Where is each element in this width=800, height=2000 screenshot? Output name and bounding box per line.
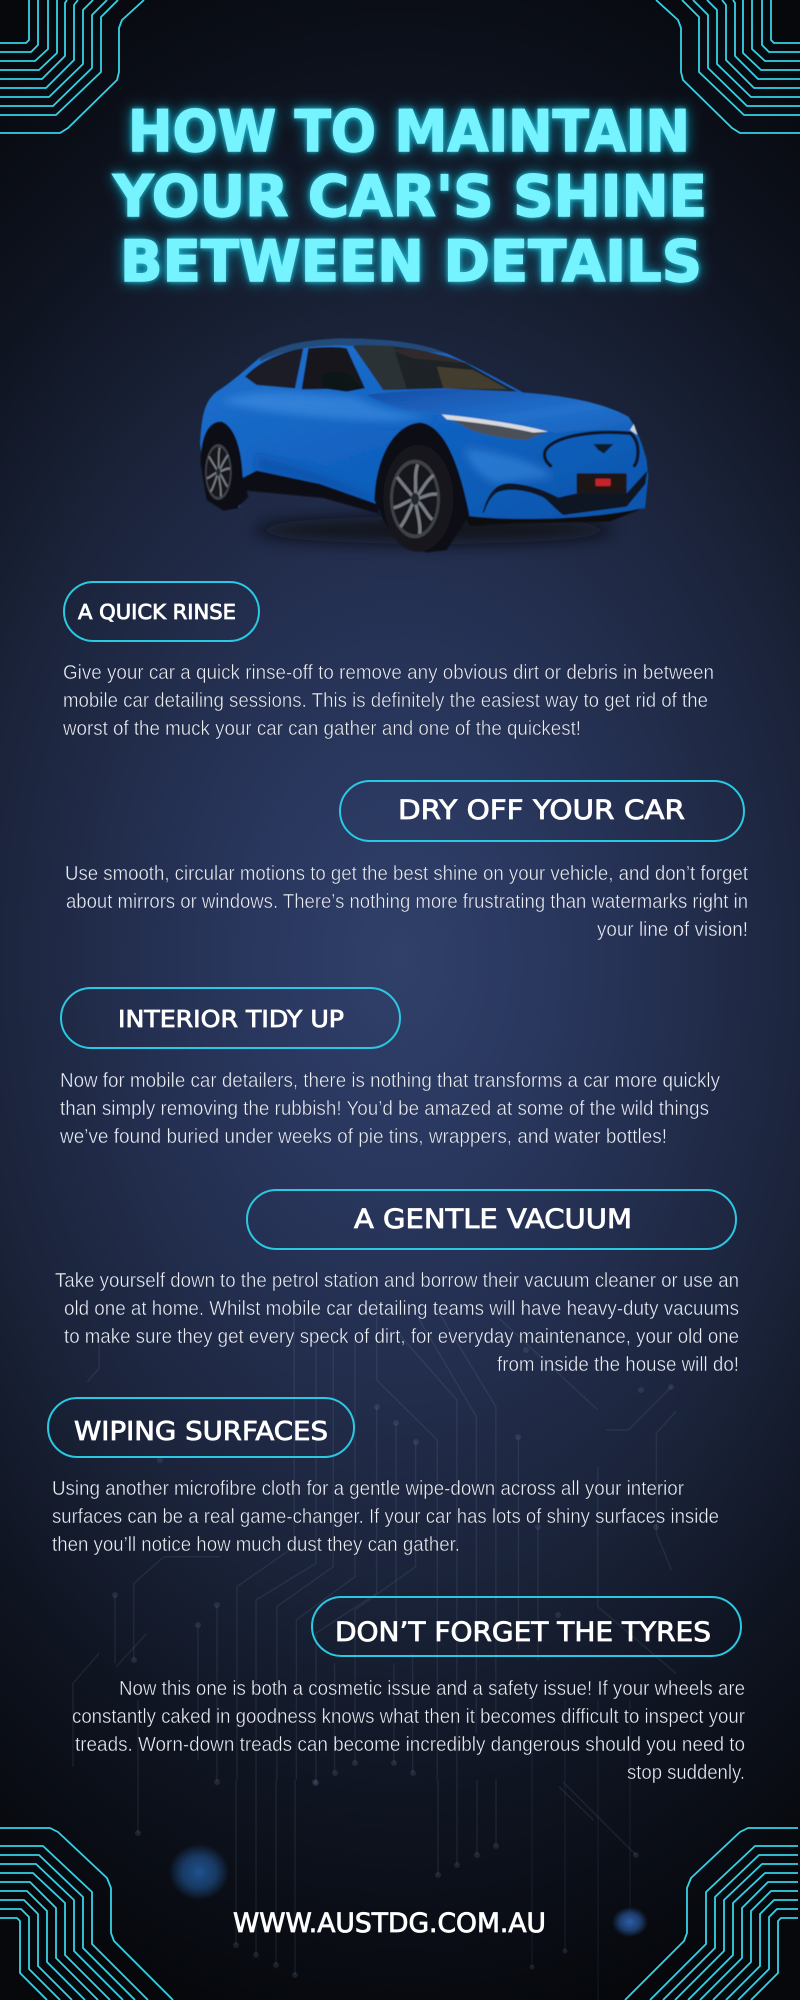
background circuit pattern (73, 1300, 676, 2000)
body text: interior tidy up: than simply removing the rubbish! You’d be amazed at some of the wild things (60, 1098, 709, 1120)
pill heading: wiping surfaces (48, 1398, 354, 1457)
body text: dry off your car: about mirrors or windows. There’s nothing more frustrating than watermarks right in (66, 891, 748, 913)
body text: a gentle vacuum: old one at home. Whilst mobile car detailing teams will have heavy-duty vacuums (64, 1298, 739, 1320)
body text: a quick rinse (62, 662, 714, 740)
body text: interior tidy up (59, 1070, 720, 1148)
body text: a quick rinse: Give your car a quick rinse-off to remove any obvious dirt or debris in between (63, 662, 714, 684)
section 5: wiping surfaces (48, 1398, 719, 1556)
body text: don't forget the tyres: Now this one is both a cosmetic issue and a safety issue! If your wheels are (119, 1678, 745, 1700)
body text: a quick rinse: worst of the muck your car can gather and one of the quickest! (62, 718, 581, 740)
license plate (577, 473, 627, 493)
body text: a gentle vacuum: to make sure they get every speck of dirt, for everyday maintenance, your old one (64, 1326, 739, 1348)
pill heading: a quick rinse (64, 582, 259, 641)
roof (260, 338, 447, 362)
body text: don't forget the tyres: stop suddenly. (627, 1762, 745, 1784)
title: HOW TO MAINTAIN (128, 99, 690, 165)
body text: wiping surfaces: surfaces can be a real game-changer. If your car has lots of shiny surfaces inside (52, 1506, 719, 1528)
grille (544, 432, 638, 467)
splitter (463, 507, 645, 526)
car illustration (200, 338, 648, 552)
section 4: a gentle vacuum (55, 1190, 739, 1376)
pill heading: a quick rinse: A QUICK RINSE (78, 600, 236, 624)
body text: wiping surfaces (52, 1478, 719, 1556)
corner lines: bottom right (625, 1828, 798, 2000)
pill heading: dry off your car (340, 781, 744, 841)
body text: dry off your car: Use smooth, circular motions to get the best shine on your vehicle, and don’t forget (65, 863, 748, 885)
front intake (483, 471, 647, 515)
title: BETWEEN DETAILS (120, 229, 702, 295)
body text: a gentle vacuum: from inside the house will do! (497, 1354, 739, 1376)
section 3: interior tidy up (59, 988, 720, 1148)
pill heading: don't forget the tyres (312, 1597, 741, 1656)
body text: dry off your car (65, 863, 748, 941)
body text: don't forget the tyres (72, 1678, 745, 1784)
title (112, 99, 707, 295)
glow: left blue light (169, 1844, 229, 1900)
rear wheel arch (201, 422, 248, 511)
front wheel arch (374, 423, 469, 552)
glow: right blue light (612, 1907, 648, 1937)
body text: interior tidy up: we’ve found buried under weeks of pie tins, wrappers, and water bottles! (59, 1126, 667, 1148)
footer url: WWW.AUSTDG.COM.AU (233, 1908, 546, 1939)
body text: wiping surfaces: then you’ll notice how much dust they can gather. (52, 1534, 460, 1556)
corner lines: bottom left (0, 1828, 173, 2000)
body text: wiping surfaces: Using another microfibre cloth for a gentle wipe-down across all your interior (52, 1478, 684, 1500)
body text: a gentle vacuum (55, 1270, 739, 1376)
side skirt (242, 471, 380, 514)
section 6: don't forget the tyres (72, 1597, 745, 1784)
windows (245, 348, 303, 388)
body text: don't forget the tyres: treads. Worn-down treads can become incredibly dangerous should you need to (75, 1734, 745, 1756)
body text: dry off your car: your line of vision! (597, 919, 748, 941)
title: YOUR CAR'S SHINE (112, 164, 707, 230)
pill heading: wiping surfaces: WIPING SURFACES (74, 1417, 328, 1447)
pill heading: a gentle vacuum (247, 1190, 736, 1249)
body text: interior tidy up: Now for mobile car detailers, there is nothing that transforms a car more quickly (60, 1070, 720, 1092)
corner lines: top right (656, 0, 800, 133)
pill heading: don't forget the tyres: DON’T FORGET THE TYRES (335, 1617, 711, 1648)
pill heading: interior tidy up (61, 988, 400, 1048)
emblem (593, 444, 613, 453)
mirror (322, 372, 364, 392)
body text: a quick rinse: mobile car detailing sessions. This is definitely the easiest way to get rid of the (63, 690, 708, 712)
section 1: a quick rinse (62, 582, 714, 740)
headlight (442, 415, 547, 440)
pill heading: interior tidy up: INTERIOR TIDY UP (118, 1005, 344, 1033)
corner lines: top left (0, 0, 144, 133)
body text: don't forget the tyres: constantly caked in goodness knows what then it becomes difficult to inspect your (72, 1706, 745, 1728)
section 2: dry off your car (65, 781, 748, 941)
pill heading: dry off your car: DRY OFF YOUR CAR (398, 795, 685, 826)
body text: a gentle vacuum: Take yourself down to the petrol station and borrow their vacuum cleaner or use an (55, 1270, 739, 1292)
pill heading: a gentle vacuum: A GENTLE VACUUM (354, 1204, 632, 1235)
